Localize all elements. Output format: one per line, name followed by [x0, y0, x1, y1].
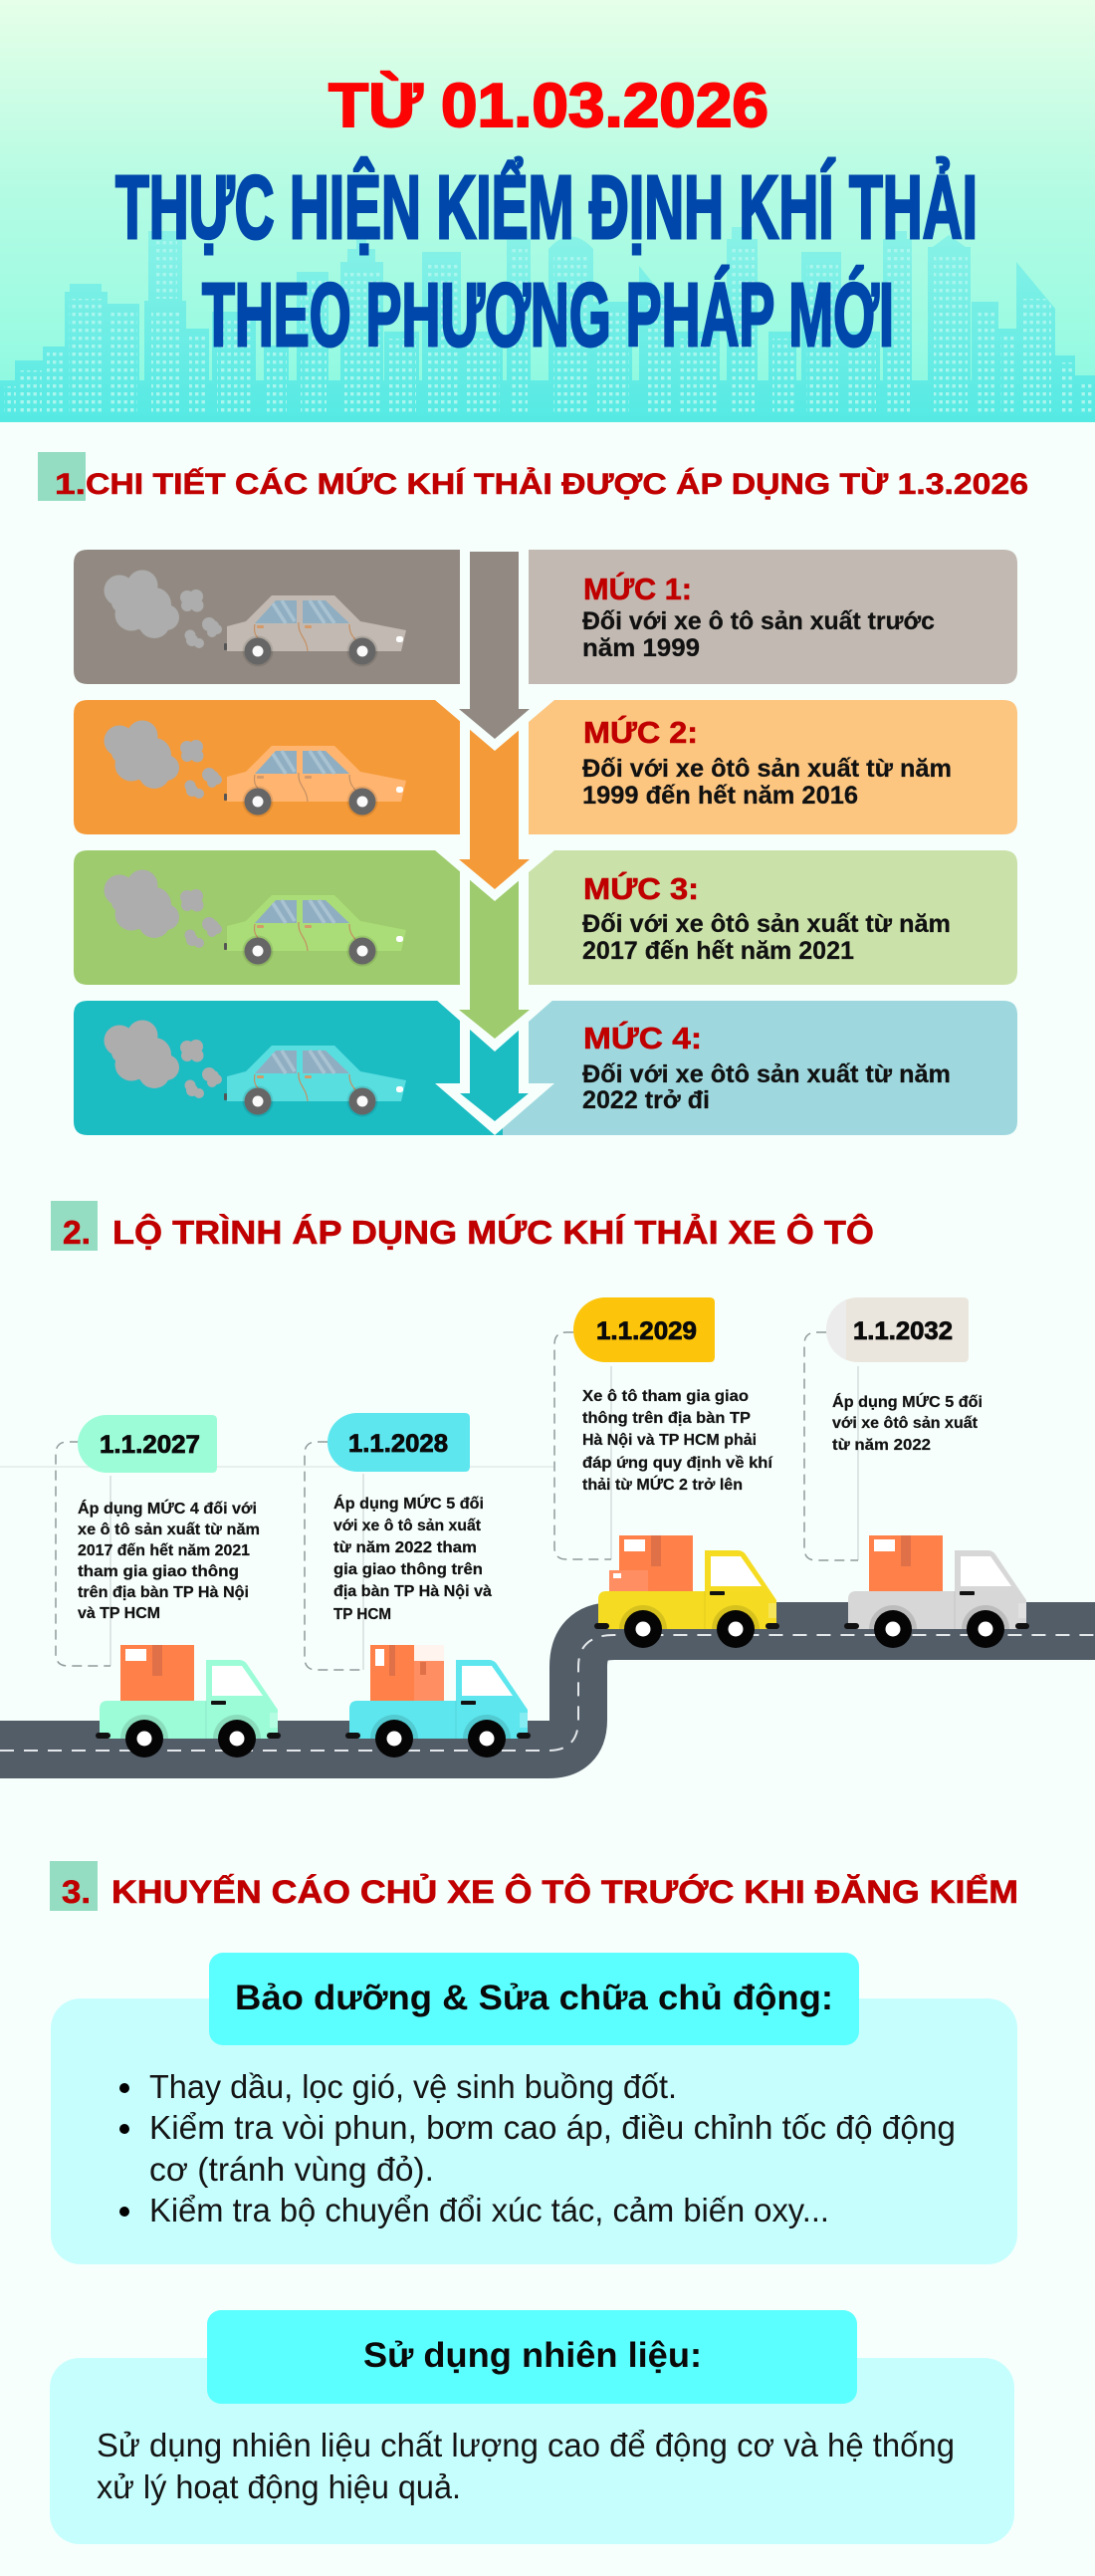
section 3 heading	[50, 1861, 1018, 1911]
icon: grey truck	[844, 1535, 1029, 1648]
arrow: level 1	[435, 543, 554, 751]
panel: level 2 left with car	[74, 700, 468, 834]
milestone 2027	[56, 1415, 281, 1757]
panel: level 1 description: Đối với xe ô tô sản xuất trước	[582, 607, 935, 635]
description: và TP HCM	[78, 1605, 160, 1622]
section 1 heading	[38, 452, 1028, 501]
connector	[56, 1442, 110, 1666]
description: TP HCM	[333, 1606, 391, 1623]
panel: level 3 description	[518, 850, 1017, 985]
description: đáp ứng quy định về khí	[582, 1455, 773, 1472]
panel: level 1 description	[518, 550, 1017, 684]
panel heading: Bảo dưỡng & Sửa chữa chủ động:	[235, 1979, 833, 2017]
description: với xe ôtô sản xuất	[832, 1415, 979, 1432]
header banner	[0, 0, 1095, 422]
date tag	[328, 1413, 470, 1472]
panel heading	[207, 2310, 857, 2404]
panel: level 1 description: năm 1999	[582, 634, 700, 662]
description: thải từ MỨC 2 trở lên	[582, 1475, 743, 1494]
checklist: Kiểm tra bộ chuyển đổi xúc tác, cảm biến oxy...	[149, 2192, 829, 2228]
description	[333, 1494, 492, 1623]
description: từ năm 2022	[832, 1437, 931, 1454]
panel: fuel	[50, 2310, 1014, 2544]
city skyline	[0, 227, 1095, 422]
section 2 heading: LỘ TRÌNH ÁP DỤNG MỨC KHÍ THẢI XE Ô TÔ	[112, 1213, 874, 1251]
panel: level 4 description: 2022 trở đi	[582, 1086, 710, 1114]
icon: cyan truck	[345, 1645, 531, 1757]
panel: level 2 description	[518, 700, 1017, 834]
icon: smoke and green car	[104, 870, 406, 966]
icon: smoke and teal car	[104, 1020, 406, 1117]
description: trên địa bàn TP Hà Nội	[78, 1584, 249, 1601]
panel: level 2 description: Đối với xe ôtô sản xuất từ năm	[582, 755, 952, 783]
connector	[554, 1332, 611, 1559]
checklist: Thay dầu, lọc gió, vệ sinh buồng đốt.	[149, 2068, 677, 2105]
section 2 heading	[51, 1201, 874, 1251]
icon: smoke and orange car	[104, 721, 406, 817]
panel: level 2 description: MỨC 2:	[583, 714, 698, 750]
date tag	[826, 1297, 969, 1362]
section 2 heading: 2.	[63, 1214, 91, 1251]
description	[582, 1388, 773, 1494]
section 3 heading: KHUYẾN CÁO CHỦ XE Ô TÔ TRƯỚC KHI ĐĂNG KIỂM	[111, 1874, 1018, 1910]
panel: level 4 description	[503, 1001, 1017, 1135]
date tag: 1.1.2028	[348, 1430, 448, 1458]
checklist	[119, 2068, 956, 2228]
panel heading: Sử dụng nhiên liệu:	[363, 2336, 702, 2375]
description: tham gia giao thông	[78, 1563, 239, 1580]
panel: level 3 description: Đối với xe ôtô sản xuất từ năm	[582, 910, 951, 938]
connector	[804, 1332, 858, 1560]
date tag: 1.1.2029	[596, 1317, 697, 1345]
section 3 heading: 3.	[62, 1874, 91, 1910]
body text: xử lý hoạt động hiệu quả.	[97, 2468, 461, 2505]
panel: level 3 left with car	[74, 850, 468, 985]
panel: level 4 description: Đối với xe ôtô sản xuất từ năm	[582, 1060, 951, 1088]
milestone 2032	[804, 1297, 1029, 1648]
road	[0, 1631, 1095, 1751]
panel: level 2 description: 1999 đến hết năm 2016	[582, 782, 858, 810]
panel: maintenance	[51, 1953, 1017, 2264]
description: Áp dụng MỨC 5 đối	[333, 1494, 484, 1513]
checklist: Kiểm tra vòi phun, bơm cao áp, điều chỉnh tốc độ động	[149, 2109, 956, 2146]
icon: smoke and grey car	[104, 570, 406, 667]
panel heading	[209, 1953, 859, 2045]
faint timeline rule	[0, 1466, 553, 1468]
date tag	[78, 1415, 217, 1473]
panel: level 1 left with car	[74, 550, 468, 684]
arrow: level 2	[435, 697, 554, 901]
description: thông trên địa bàn TP	[582, 1410, 751, 1427]
body text	[97, 2427, 955, 2505]
body text: Sử dụng nhiên liệu chất lượng cao để động cơ và hệ thống	[97, 2427, 955, 2463]
icon: mint truck	[96, 1645, 281, 1757]
date tag	[573, 1297, 715, 1362]
panel: level 3 description: 2017 đến hết năm 2021	[582, 937, 854, 965]
icon: yellow truck	[594, 1535, 779, 1648]
description	[832, 1392, 983, 1454]
panel: level 4 description: MỨC 4:	[583, 1020, 702, 1055]
date tag: 1.1.2027	[100, 1431, 200, 1459]
panel: level 3 description: MỨC 3:	[583, 870, 699, 906]
section 1 heading: CHI TIẾT CÁC MỨC KHÍ THẢI ĐƯỢC ÁP DỤNG TỪ 1.3.2026	[86, 467, 1028, 501]
checklist: cơ (tránh vùng đỏ).	[149, 2151, 434, 2188]
arrow: level 3	[435, 846, 554, 1052]
description: từ năm 2022 tham	[333, 1539, 477, 1556]
description: Áp dụng MỨC 5 đối	[832, 1392, 983, 1411]
description: địa bàn TP Hà Nội và	[333, 1583, 492, 1600]
description: xe ô tô sản xuất từ năm	[78, 1522, 260, 1538]
description: 2017 đến hết năm 2021	[78, 1542, 250, 1559]
milestone 2028	[305, 1413, 531, 1757]
connector	[305, 1442, 363, 1670]
description: Xe ô tô tham gia giao	[582, 1388, 749, 1405]
panel: level 4 left with car	[74, 1001, 503, 1135]
section 1 heading: 1.	[55, 468, 86, 501]
description: gia giao thông trên	[333, 1561, 483, 1578]
description: Hà Nội và TP HCM phải	[582, 1432, 757, 1449]
milestone 2029	[554, 1297, 779, 1648]
date tag: 1.1.2032	[853, 1317, 953, 1345]
description: Áp dụng MỨC 4 đối với	[78, 1499, 257, 1518]
description: với xe ô tô sản xuất	[333, 1518, 482, 1534]
arrow: level 4	[435, 996, 554, 1135]
description	[78, 1499, 260, 1622]
panel: level 1 description: MỨC 1:	[583, 571, 692, 606]
title: date line: TỪ 01.03.2026	[328, 72, 768, 140]
